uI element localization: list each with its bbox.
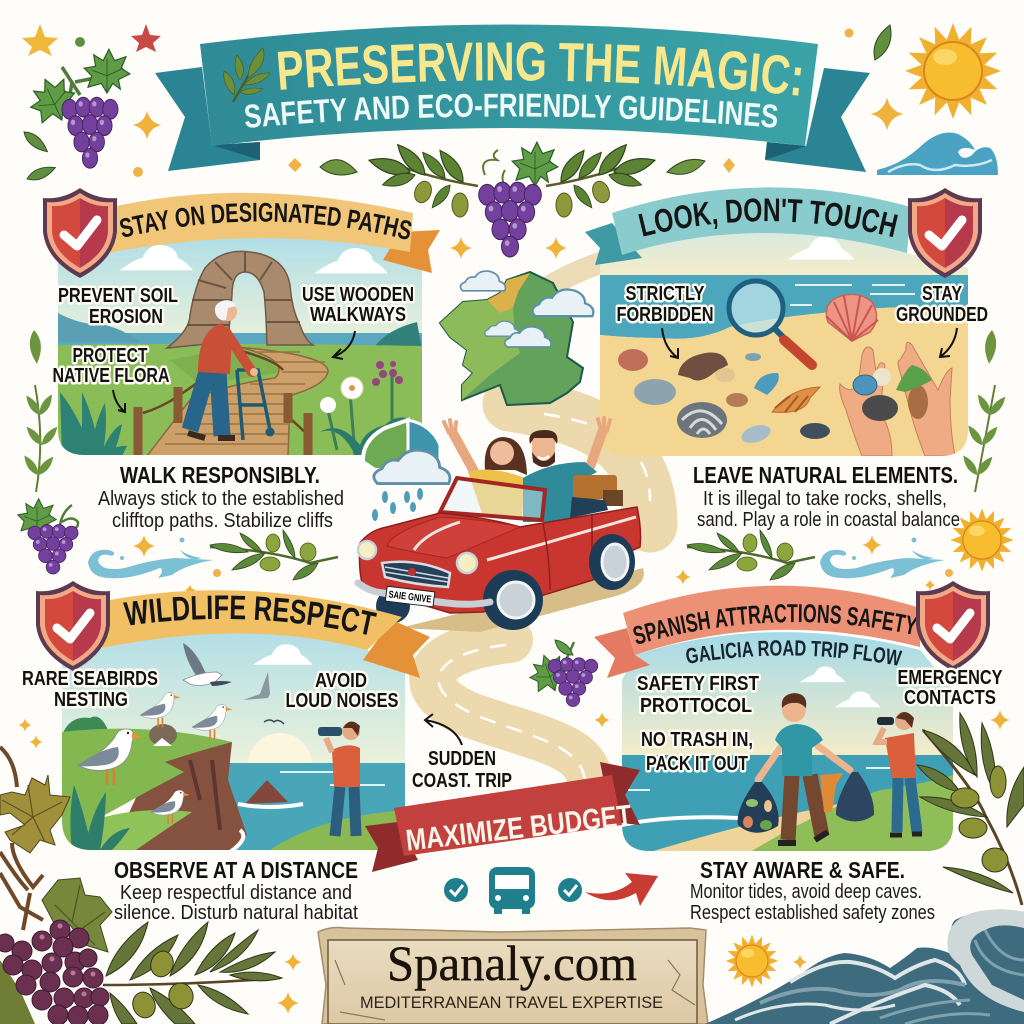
ribbon: wildlife respect: WILDLIFE RESPECT [123,596,377,635]
sudden coast trip label [412,714,512,792]
scene: seabird cliffs [62,634,405,850]
wildflowers [320,361,412,455]
icon: shield [916,581,990,671]
banner folds [212,142,806,160]
icon: grapes [23,49,130,168]
scene labels: USE WOODEN [302,284,414,306]
map of Galicia [440,271,593,405]
side branch left [21,330,60,492]
second person with binoculars [877,712,922,835]
banner right tail [765,68,870,172]
ribbon: spanish attractions safety: SPANISH ATTRACTIONS SAFETY [633,604,916,644]
caption [114,857,358,924]
scene labels: RARE SEABIRDS [22,668,158,690]
flying gulls [183,643,284,724]
scene labels: EROSION [89,306,163,328]
small star [793,955,807,969]
couple [444,418,610,522]
side branch right [960,330,1008,492]
scene labels: CONTACTS [904,687,996,709]
heads [490,441,514,465]
seashell [826,294,878,341]
car body [359,507,641,613]
caption: sand. Play a role in coastal balance [697,509,960,531]
icon: bus [489,867,535,914]
scene labels: AVOID [315,670,367,692]
caption: clifftop paths. Stabilize cliffs [112,510,333,532]
ribbon: maximize budget: MAXIMIZE BUDGET [404,799,633,858]
plaque: spanaly.com: Spanaly.com [387,935,637,991]
mid divider decoration left [18,499,338,596]
banner left tail [155,67,260,171]
caption: WALK RESPONSIBLY. [120,462,320,488]
icon: shield [43,188,117,278]
ribbon: look, don't touch [585,187,908,265]
trash bags [738,772,874,833]
scene labels: NO TRASH IN, [641,729,753,751]
icon: check [444,878,468,902]
title banner [155,24,870,172]
caption [693,462,960,531]
leaf [0,775,70,853]
wooden walkway [147,347,328,456]
scene labels [635,640,1003,775]
sudden coast trip label: SUDDEN [428,748,496,770]
central olive wreath and grapes [320,140,735,259]
scene: beach clean-up [622,625,953,855]
number plate: SAIE GNIVE [388,589,432,606]
plaque: spanaly.com: MEDITERRANEAN TRAVEL EXPERTISE [360,993,663,1012]
scene labels [52,284,414,387]
grille [382,562,450,587]
crashing wave bottom right [705,909,1024,1024]
scene labels [22,668,398,712]
pebbles and shells [618,349,830,446]
icon: wave [877,133,998,175]
grass plateau [62,729,232,850]
luggage [573,475,623,506]
items in hands [853,365,932,421]
number plate [385,586,435,607]
scene labels: PREVENT SOIL [58,285,178,307]
ribbon: spanish attractions safety [594,586,920,678]
gulls on the ground [77,729,143,785]
mid divider decoration right [675,508,1014,590]
scene labels: FORBIDDEN [616,304,714,326]
stone arch [167,251,313,348]
caption: silence. Disturb natural habitat [114,902,358,924]
caption: OBSERVE AT A DISTANCE [114,857,358,883]
volunteer with bags [758,693,850,843]
cliff [120,742,247,852]
caption: Always stick to the established [98,488,344,510]
caption: LEAVE NATURAL ELEMENTS. [693,462,958,488]
icon: check [558,878,582,902]
bumper [358,583,490,604]
scene labels: NESTING [54,689,128,711]
olive branch [103,978,280,985]
grass ledge [96,810,192,852]
wheels [376,534,635,630]
sudden coast trip label: COAST. TRIP [412,770,512,792]
scene labels: PROTECT [72,345,148,367]
panel: wildlife respect [22,581,430,924]
person with binoculars [318,721,360,836]
car shadow [400,568,644,632]
scene: clifftop walkway [58,222,422,456]
icon: magnifying glass [729,281,812,365]
torsos [468,470,525,518]
scene labels: SAFETY FIRST [637,673,759,695]
raised arms [454,430,603,475]
ribbon: wildlife respect [102,590,430,678]
sun bottom [726,935,778,987]
plaque: spanaly.com [318,928,708,1024]
scene labels: LOUD NOISES [286,690,398,712]
heading line one: PRESERVING THE MAGIC: [278,42,802,96]
scene labels: EMERGENCY [898,667,1003,689]
fence [138,350,308,456]
scene labels: PROTTOCOL [640,695,752,717]
caption [98,462,344,532]
arrow [585,873,658,906]
small grapes near road [524,640,610,728]
leaf [42,878,112,952]
caption: Respect established safety zones [690,902,935,924]
icon: rainy region map [363,420,450,521]
olive branch right [917,710,1024,905]
caption [690,857,935,924]
scene labels: STAY [922,283,963,305]
red convertible car with couple [358,418,644,632]
scene labels: GROUNDED [896,304,988,326]
agave plant [60,392,127,456]
hands [840,342,955,456]
icon: shield [36,581,110,671]
transport icons row [444,867,658,914]
icon: shield [908,188,982,278]
heading line two: SAFETY AND ECO-FRIENDLY GUIDELINES [245,94,778,128]
grape cluster [0,920,109,1024]
elderly walker [188,300,274,440]
panel: spanish attractions safety [594,581,1003,924]
banner olive sprig [224,48,270,102]
corner decorations top left [21,24,302,184]
caption: STAY AWARE & SAFE. [700,857,905,883]
scene labels [616,283,988,326]
ribbon: stay on designated paths: STAY ON DESIGNATED PATHS [120,202,412,240]
ribbon: maximize budget [365,762,640,872]
nesting birds [140,693,232,746]
scene labels: NATIVE FLORA [52,365,170,387]
arrows [113,390,125,412]
banner body [200,24,818,146]
scene labels: PACK IT OUT [646,753,748,775]
scene labels: STRICTLY [626,283,705,305]
panel: stay on designated paths [43,188,440,532]
caption: It is illegal to take rocks, shells, [703,488,947,510]
vine [0,747,43,930]
car seats [570,497,608,518]
ribbon: look, don't touch: LOOK, DON'T TOUCH [638,198,898,238]
vine, grapes and olives bottom left [0,718,302,1024]
woman hair [485,437,527,478]
ribbon: stay on designated paths [110,192,440,273]
scene labels: WALKWAYS [310,304,406,326]
headlights [358,541,376,559]
caption: Keep respectful distance and [120,882,352,904]
panel: look, don't touch [585,187,988,531]
scene labels: GALICIA ROAD TRIP FLOW [686,640,902,666]
scene: beach [600,233,968,456]
winding road [432,260,650,785]
windscreen [440,478,545,520]
caption: Monitor tides, avoid deep caves. [690,881,922,903]
icon: sun [905,23,1001,119]
corner decorations top right [844,23,1001,175]
arrows [662,328,678,358]
